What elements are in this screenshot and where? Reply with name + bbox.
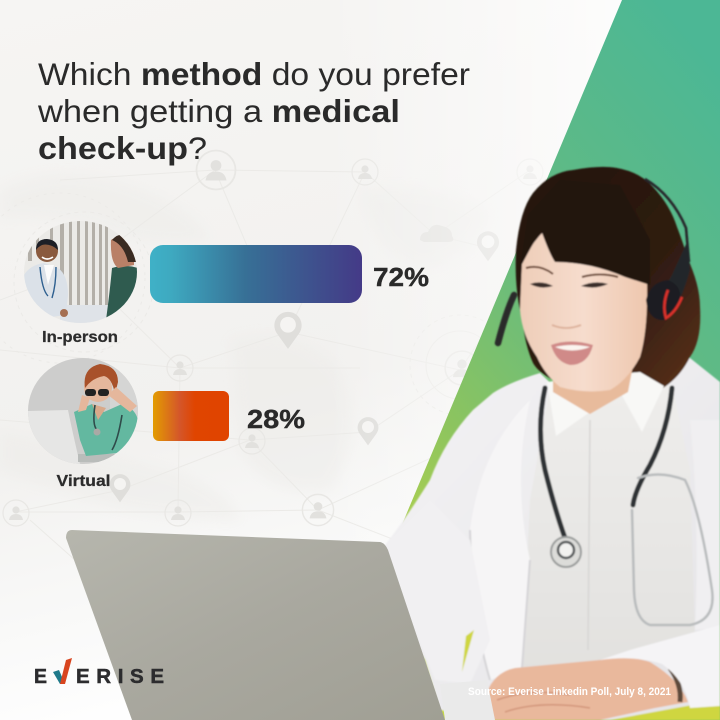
green diagonal panel [320, 0, 720, 720]
virtual photo [28, 358, 140, 464]
logo: EVERISE: ERISE [76, 665, 164, 688]
cuff [600, 625, 720, 708]
hair back [516, 167, 700, 390]
laptop [66, 530, 445, 720]
bar: virtual 28% [153, 391, 229, 441]
logo: EVERISE [34, 658, 164, 688]
doctor figure [24, 239, 68, 318]
keyboard deck under hand [440, 680, 495, 720]
neck [553, 355, 635, 414]
shirt [522, 384, 695, 668]
value: 28%: 28% [247, 404, 305, 434]
eyes [530, 282, 553, 288]
title: when getting a medical [37, 93, 400, 129]
stethoscope [540, 388, 713, 625]
bar: in-person 72% [150, 245, 362, 303]
brows [526, 267, 618, 277]
nurse figure [74, 364, 138, 456]
coat sleeve left [385, 500, 490, 684]
logo: EVERISE: E [34, 665, 47, 688]
collar [547, 372, 664, 436]
source note: Source: Everise Linkedin Poll, July 8, 2021 [468, 686, 671, 698]
white coat [385, 358, 720, 720]
headset [645, 179, 689, 262]
face [520, 215, 647, 391]
in-person label: In-person [42, 329, 118, 346]
in-person photo [24, 221, 138, 325]
nose [552, 325, 581, 328]
title: check-up ? [38, 130, 207, 166]
laptop in photo [28, 410, 80, 464]
doctor illustration [385, 167, 720, 720]
yellow strip [610, 700, 720, 720]
title [37, 56, 470, 166]
virtual label: Virtual [56, 473, 110, 490]
bracelet [670, 668, 680, 702]
hand [487, 658, 688, 720]
mouth [551, 342, 593, 365]
title: Which method do you prefer [38, 56, 470, 92]
patient figure [106, 234, 138, 320]
value: 72%: 72% [373, 262, 429, 292]
bangs [520, 180, 650, 285]
